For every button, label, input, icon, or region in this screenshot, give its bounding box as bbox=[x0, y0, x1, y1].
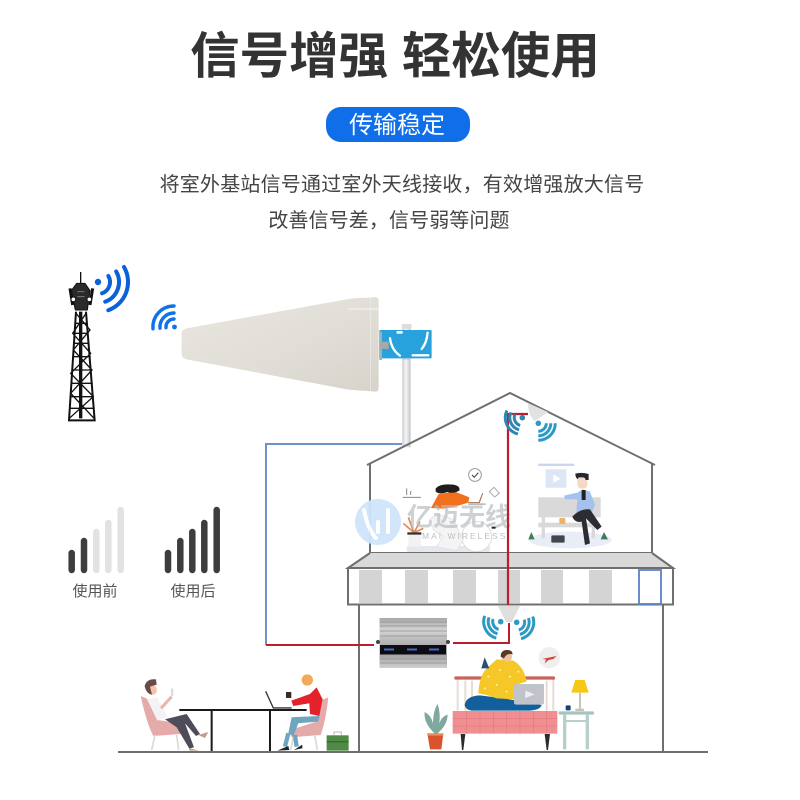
ground ellipse bbox=[528, 532, 612, 548]
laptop bbox=[266, 691, 292, 708]
cup bbox=[566, 705, 571, 710]
antenna pole bbox=[402, 324, 412, 447]
signal bars: after bbox=[168, 510, 217, 600]
cup bbox=[559, 518, 565, 524]
badge: 传输稳定: 传输稳定 bbox=[349, 112, 445, 139]
left illustration: people at table bbox=[141, 674, 349, 751]
watermark logo bbox=[355, 499, 401, 545]
right woman bbox=[277, 674, 323, 751]
plane bubble bbox=[539, 647, 560, 668]
bars bbox=[72, 510, 121, 570]
right chair bbox=[290, 697, 328, 750]
bushes bbox=[528, 532, 608, 539]
lamp bbox=[571, 680, 589, 711]
blue cable bbox=[266, 444, 402, 645]
label: 使用前 bbox=[72, 583, 118, 600]
wifi icon: lower left bbox=[484, 616, 504, 638]
headboard bbox=[454, 676, 555, 711]
torso bbox=[431, 492, 469, 509]
icon: tower signal waves bbox=[95, 267, 128, 310]
side table bbox=[559, 711, 594, 749]
phone bbox=[582, 490, 586, 500]
wifi icon: lower right bbox=[514, 616, 534, 639]
table bbox=[179, 710, 307, 751]
attic repeater emitter bbox=[528, 403, 548, 421]
description text: 将室外基站信号通过室外天线接收，有效增强放大信号 bbox=[160, 173, 644, 196]
check mark badge bbox=[469, 469, 481, 481]
bench bbox=[538, 497, 601, 538]
antenna body bbox=[182, 297, 379, 392]
phone bbox=[286, 692, 291, 698]
red cables bbox=[266, 414, 528, 645]
signal bars: before bbox=[72, 510, 121, 600]
outdoor antenna bbox=[182, 297, 432, 447]
bag bbox=[551, 535, 565, 543]
briefcase bbox=[327, 732, 349, 751]
top bar bbox=[538, 464, 574, 466]
left chair bbox=[141, 696, 181, 750]
torso bbox=[478, 659, 527, 699]
watermark english: MAI WIRELESS bbox=[422, 531, 507, 541]
round chair bbox=[462, 522, 492, 552]
title: 信号增强 轻松使用 bbox=[190, 29, 600, 84]
table bbox=[468, 503, 486, 505]
small object bbox=[492, 527, 496, 529]
laptop bbox=[468, 493, 483, 503]
attic illustration: woman with laptop bbox=[403, 469, 499, 552]
watermark name: 亿迈无线 bbox=[407, 502, 511, 532]
blue window frame bbox=[639, 570, 661, 604]
watermark bbox=[355, 499, 511, 545]
label: 使用后 bbox=[170, 583, 216, 600]
shirt bbox=[564, 489, 595, 516]
badge: 传输稳定 bbox=[326, 107, 470, 142]
description text: 改善信号差，信号弱等问题 bbox=[268, 209, 510, 232]
legs bbox=[430, 515, 463, 551]
hair bbox=[575, 473, 589, 480]
description text bbox=[160, 173, 644, 232]
video picture bbox=[546, 469, 566, 488]
head bbox=[577, 477, 587, 489]
laptop bbox=[514, 684, 544, 705]
bars bbox=[168, 510, 217, 570]
shelf bbox=[403, 488, 421, 497]
wifi icon: attic left bbox=[505, 410, 525, 434]
antenna mounting bracket bbox=[379, 330, 432, 360]
wifi icon: attic right bbox=[536, 420, 555, 440]
signal repeater device bbox=[376, 618, 450, 668]
attic illustration: man on bench bbox=[528, 464, 612, 548]
house outline bbox=[348, 393, 673, 751]
phone bbox=[481, 657, 489, 668]
legs bbox=[572, 509, 602, 545]
awning stripes bbox=[359, 570, 612, 603]
ceiling emitter, lower room bbox=[498, 606, 520, 622]
icon: antenna signal waves bbox=[153, 306, 177, 329]
icon: cell tower bbox=[69, 272, 95, 420]
small card icon bbox=[489, 487, 499, 497]
legs bbox=[465, 695, 542, 711]
plant bbox=[425, 704, 448, 749]
hair bbox=[436, 484, 460, 493]
floor mat bbox=[407, 546, 490, 552]
head bbox=[501, 650, 513, 662]
floor line bbox=[118, 751, 708, 753]
left man bbox=[145, 679, 208, 751]
bed bbox=[453, 711, 557, 750]
potted plant bbox=[403, 517, 423, 547]
lower room illustration: man on bed bbox=[425, 647, 594, 750]
